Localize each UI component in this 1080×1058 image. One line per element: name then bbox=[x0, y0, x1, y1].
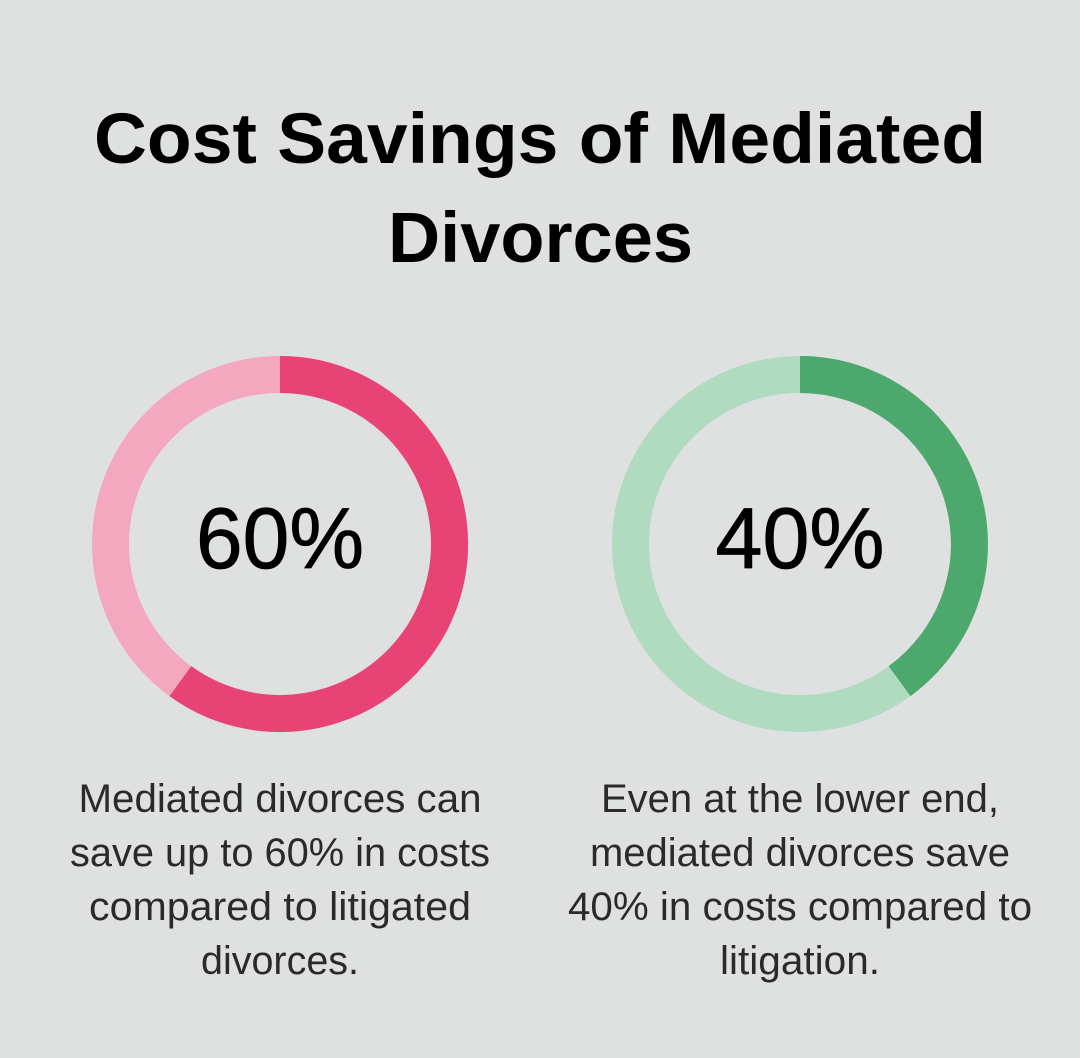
value: 40%: 40% bbox=[716, 491, 884, 587]
title bbox=[94, 100, 986, 278]
description: 40% savings: Even at the lower end, bbox=[601, 777, 999, 821]
description: 40% savings: litigation. bbox=[720, 939, 880, 983]
value: 60%: 60% bbox=[196, 491, 364, 587]
panel: 60% savings bbox=[70, 374, 490, 983]
description: 40% savings: mediated divorces save bbox=[590, 831, 1010, 875]
description: 60% savings: save up to 60% in costs bbox=[70, 831, 490, 875]
description: 60% savings: Mediated divorces can bbox=[78, 777, 482, 821]
description: 40% savings bbox=[568, 777, 1032, 983]
donut chart: 60% bbox=[110, 374, 450, 714]
title: Cost Savings of Mediated bbox=[94, 100, 986, 179]
description: 60% savings: compared to litigated bbox=[89, 885, 471, 929]
description: 40% savings: 40% in costs compared to bbox=[568, 885, 1032, 929]
title: Divorces bbox=[388, 199, 693, 278]
description: 60% savings bbox=[70, 777, 490, 983]
description: 60% savings: divorces. bbox=[201, 939, 359, 983]
panel: 40% savings bbox=[568, 374, 1032, 983]
donut chart: 40% bbox=[630, 374, 970, 714]
